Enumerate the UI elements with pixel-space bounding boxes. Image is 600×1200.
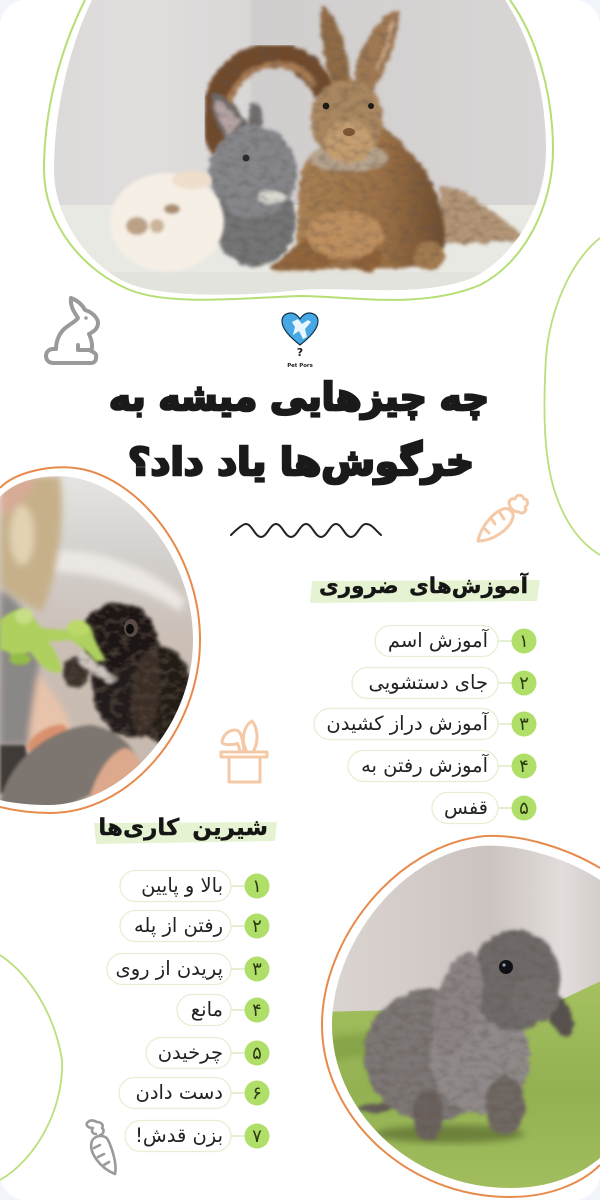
trick item 5: چرخیدن xyxy=(158,1041,223,1064)
trick item 3 xyxy=(107,954,270,984)
logo: Pet Pors xyxy=(282,313,318,369)
hair xyxy=(0,476,62,612)
trick item 5 xyxy=(146,1038,270,1068)
hand xyxy=(25,723,68,752)
trick item 2: رفتن از پله xyxy=(134,914,223,937)
decorative curve: right green xyxy=(544,238,600,555)
squiggle divider xyxy=(231,524,381,537)
burlap tail xyxy=(440,186,526,243)
trick item 2 xyxy=(120,910,270,942)
bokeh lights xyxy=(45,551,185,612)
list item 4 xyxy=(348,750,536,782)
list item 5: قفس xyxy=(444,796,488,819)
trick item 3: ۳ xyxy=(252,959,262,980)
trick item 6: ۶ xyxy=(252,1083,262,1104)
list item 1: آموزش اسم xyxy=(388,628,490,652)
list item 1 xyxy=(375,626,536,656)
icon: carrot gray xyxy=(87,1120,116,1174)
trick item 5: ۵ xyxy=(252,1043,262,1064)
shirt xyxy=(0,590,40,745)
list item 2 xyxy=(352,668,536,698)
title xyxy=(109,375,489,484)
list item 1: ۱ xyxy=(519,631,529,652)
patterned skirt xyxy=(0,745,30,795)
photo frame: top green xyxy=(44,0,553,300)
trick item 7: ۷ xyxy=(252,1126,262,1147)
trick item 1 xyxy=(120,870,270,902)
trick item 6 xyxy=(119,1078,270,1108)
list item 5 xyxy=(432,792,536,824)
photo: girl feeding rabbit xyxy=(0,476,193,805)
rabbit xyxy=(64,604,191,743)
rabbit eye xyxy=(124,619,138,637)
list item 5: ۵ xyxy=(519,798,529,819)
list item 3: آموزش دراز کشیدن xyxy=(326,711,490,735)
face xyxy=(0,479,34,514)
celery xyxy=(0,608,106,673)
trick item 6: دست دادن xyxy=(136,1081,223,1104)
trick item 7 xyxy=(125,1120,270,1152)
logo: Pet Pors: ? xyxy=(297,346,303,359)
heading: cute tricks: شیرین کاری‌ها xyxy=(98,815,268,841)
trick item 4: مانع xyxy=(191,998,223,1021)
list item 3 xyxy=(314,708,536,740)
photo: gray lop rabbit xyxy=(332,846,600,1188)
list item 4: ۴ xyxy=(519,756,529,777)
photo frame: right orange xyxy=(322,836,600,1197)
icon: rabbit xyxy=(46,298,98,363)
icon: carrot peach xyxy=(478,495,528,541)
photo: three rabbits xyxy=(40,0,560,305)
rabbit eye xyxy=(499,960,513,974)
list item 2: جای دستشویی xyxy=(368,671,488,694)
logo: Pet Pors: Pet Pors xyxy=(287,363,313,369)
panel: cute tricks xyxy=(94,815,277,1152)
title: خرگوش‌ها یاد داد؟ xyxy=(128,440,474,484)
white rabbit xyxy=(110,171,224,271)
rabbit eyes and noses xyxy=(242,103,374,162)
icon: hat with rabbit ears xyxy=(221,721,267,782)
trick item 2: ۲ xyxy=(252,916,262,937)
sleeve xyxy=(0,725,142,810)
list item 2: ۲ xyxy=(519,673,529,694)
trick item 1: بالا و پایین xyxy=(141,874,223,897)
trick item 4 xyxy=(177,994,270,1026)
panel: essential training xyxy=(310,572,540,824)
brown rabbit xyxy=(270,6,445,272)
decorative curve: bottom left green xyxy=(0,955,62,1180)
list item 3: ۳ xyxy=(519,714,529,735)
trick item 7: بزن قدش! xyxy=(135,1124,223,1147)
list item 4: آموزش رفتن به xyxy=(361,753,490,777)
heading: essential training: آموزش‌های ضروری xyxy=(319,572,529,599)
photo frame: left orange xyxy=(0,467,200,813)
arm xyxy=(25,674,72,743)
wreath xyxy=(216,55,325,150)
title: چه چیزهایی میشه به xyxy=(109,375,489,419)
trick item 1: ۱ xyxy=(252,876,262,897)
gray rabbit xyxy=(209,92,297,266)
trick item 3: پریدن از روی xyxy=(116,957,223,980)
trick item 4: ۴ xyxy=(252,1000,262,1021)
